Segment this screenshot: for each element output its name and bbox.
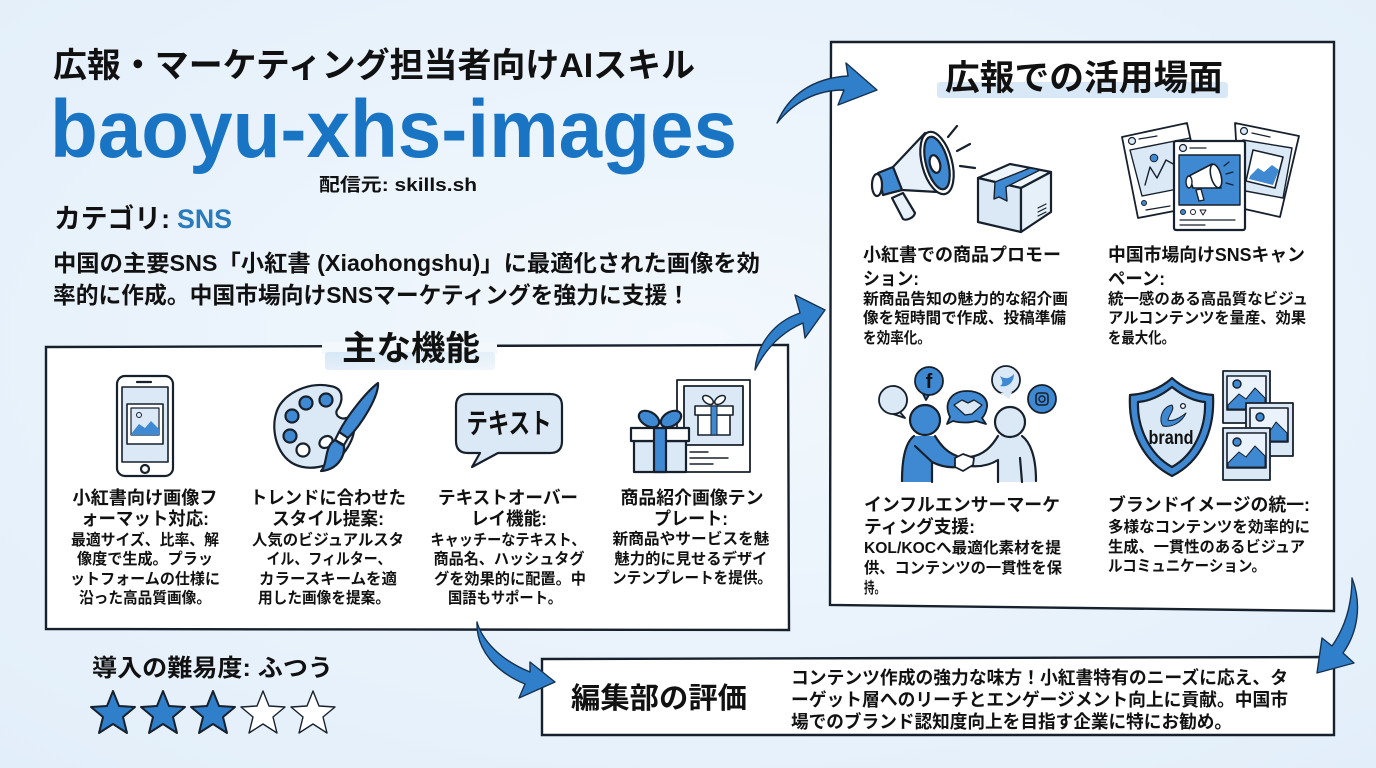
feature: product templates [612, 488, 772, 587]
use case: influencer marketing [864, 495, 1062, 597]
feature: text overlay: キャッチーなテキスト、 [430, 531, 586, 549]
feature: product templates: ンテンプレートを提供。 [612, 569, 772, 587]
subtitle: 広報・マーケティング担当者向けAIスキル [53, 47, 695, 85]
feature: product templates: 新商品やサービスを魅 [612, 529, 770, 548]
icon: phone [117, 376, 173, 476]
review text: コンテンツ作成の強力な味方！小紅書特有のニーズに応え、タ [791, 667, 1288, 688]
stars: 3 of 5 [91, 691, 335, 733]
review text [791, 667, 1288, 732]
description: 中国の主要SNS「小紅書 (Xiaohongshu)」に最適化された画像を効 [53, 250, 760, 276]
use case: SNS campaign: ペーン: [1108, 269, 1165, 289]
icon: social posts [1122, 123, 1299, 230]
panel: main features [46, 330, 789, 630]
icon: brand shield and images [1130, 371, 1293, 480]
feature: trend styles: イル、フィルター、 [266, 550, 392, 568]
title: baoyu-xhs-images [50, 84, 737, 175]
feature: trend styles: 用した画像を提案。 [258, 589, 390, 607]
arrow: features to review [477, 622, 555, 698]
review text: 場でのブランド認知度向上を目指す企業に特にお勧め。 [791, 711, 1232, 732]
feature: format support [70, 487, 220, 607]
use case: brand image: ブランドイメージの統一: [1108, 494, 1310, 515]
icon: megaphone and box [872, 126, 1051, 232]
icon: palette and brush [274, 383, 378, 471]
icon: influencers handshake [879, 366, 1056, 482]
difficulty label: 導入の難易度: ふつう [92, 655, 333, 682]
arrow: features to use cases [755, 295, 825, 370]
panel: PR use cases [830, 42, 1334, 611]
use case: product promotion: 新商品告知の魅力的な紹介画 [863, 289, 1068, 308]
icon: influencers handshake: f [926, 371, 933, 393]
feature: trend styles: 人気のビジュアルスタ [252, 530, 404, 549]
use case: product promotion: ション: [863, 269, 919, 289]
description: 率的に作成。中国市場向けSNSマーケティングを強力に支援！ [53, 282, 690, 308]
feature: format support: 最適サイズ、比率、解 [71, 530, 219, 549]
icon: brand shield and images: brand [1148, 428, 1194, 449]
use case: SNS campaign [1108, 245, 1308, 347]
use case: product promotion [863, 244, 1068, 347]
feature: text overlay: レイ機能: [471, 509, 547, 529]
category [54, 203, 232, 234]
use case: brand image: 生成、一貫性のあるビジュア [1108, 537, 1305, 556]
use case: product promotion: を効率化。 [863, 329, 931, 347]
use case: brand image: ルコミュニケーション。 [1108, 557, 1266, 575]
feature: text overlay [430, 488, 586, 607]
use case: influencer marketing: 供、コンテンツの一貫性を保 [864, 558, 1062, 577]
feature: format support: 沿った高品質画像。 [79, 589, 211, 607]
use case: product promotion: 小紅書での商品プロモー [863, 244, 1061, 265]
feature: trend styles: スタイル提案: [272, 508, 384, 529]
feature: format support: 像度で生成。プラッ [77, 549, 213, 568]
icon: text speech bubble: テキスト [466, 408, 552, 439]
feature: text overlay: グを効果的に配置。中 [434, 569, 586, 588]
category: カテゴリ: [54, 203, 170, 234]
feature: text overlay: 商品名、ハッシュタグ [434, 549, 585, 568]
feature: trend styles: カラースキームを適 [259, 569, 397, 588]
icon: gift and template [631, 380, 750, 472]
use case: SNS campaign: を最大化。 [1108, 329, 1175, 347]
use case: influencer marketing: インフルエンサーマーケ [864, 495, 1060, 515]
feature: text overlay: テキストオーバー [438, 488, 578, 508]
use case: brand image: 多様なコンテンツを効率的に [1108, 517, 1310, 536]
arrow: use cases to review [1317, 578, 1358, 673]
heading: main features: 主な機能 [342, 330, 480, 368]
arrow: title to use cases [777, 63, 877, 123]
feature: text overlay: 国語もサポート。 [448, 589, 562, 607]
use case: brand image [1108, 494, 1310, 575]
feature: product templates: 魅力的に見せるデザイ [614, 549, 768, 568]
use case: SNS campaign: 中国市場向けSNSキャン [1108, 245, 1305, 265]
use case: influencer marketing: KOL/KOCへ最適化素材を提 [864, 538, 1062, 557]
icon: text speech bubble [456, 394, 562, 467]
panel: editorial review [542, 657, 1334, 735]
source: 配信元: skills.sh [319, 175, 477, 195]
feature: product templates: プレート: [654, 509, 728, 529]
use case: SNS campaign: アルコンテンツを量産、効果 [1108, 309, 1306, 327]
heading: editorial review: 編集部の評価 [571, 682, 747, 715]
difficulty rating [91, 655, 335, 733]
feature: product templates: 商品紹介画像テン [620, 488, 764, 508]
use case: influencer marketing: ティング支援: [864, 516, 975, 537]
category: SNS [177, 204, 232, 234]
feature: format support: ォーマット対応: [81, 509, 209, 529]
review text: ーゲット層へのリーチとエンゲージメント向上に貢献。中国市 [791, 690, 1288, 710]
use case: product promotion: 像を短時間で作成、投稿準備 [863, 308, 1066, 327]
feature: format support: ットフォームの仕様に [70, 569, 220, 588]
feature: format support: 小紅書向け画像フ [72, 487, 218, 508]
use case: SNS campaign: 統一感のある高品質なビジュ [1108, 289, 1308, 308]
feature: trend styles: トレンドに合わせた [250, 488, 406, 508]
heading: use cases: 広報での活用場面 [945, 59, 1223, 98]
description [53, 250, 760, 308]
use case: influencer marketing: 持。 [864, 579, 885, 597]
feature: trend styles [250, 488, 406, 607]
